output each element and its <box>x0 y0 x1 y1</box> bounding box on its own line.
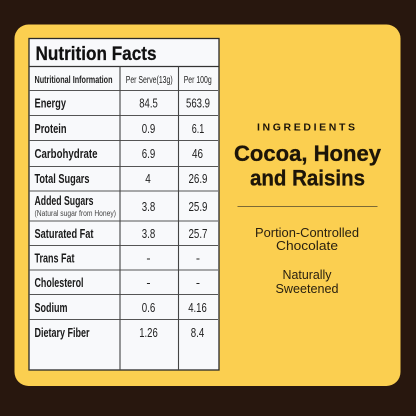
row: Added Sugars: (Natural sugar from Honey) <box>34 209 116 218</box>
row: Saturated Fat: 25.7 <box>188 227 208 241</box>
row: Trans Fat <box>34 252 200 266</box>
row: Total Sugars: Total Sugars <box>34 172 90 186</box>
row: Trans Fat: Trans Fat <box>34 252 75 266</box>
row: Total Sugars: 4 <box>145 172 151 186</box>
row: Protein: Protein <box>34 122 66 136</box>
row: Cholesterol: - <box>146 276 151 290</box>
panel: nutrition table <box>29 38 219 370</box>
heading: product ingredients: and Raisins <box>250 166 365 190</box>
row: Dietary Fiber: 8.4 <box>191 326 204 340</box>
text block: naturally sweetened: Naturally <box>282 268 332 282</box>
row: Dietary Fiber: 1.26 <box>139 326 158 340</box>
row: Energy <box>34 96 210 110</box>
row: Total Sugars <box>34 172 208 186</box>
column headers: Per 100g <box>184 75 212 86</box>
row: Added Sugars <box>34 194 208 218</box>
row: Added Sugars: 25.9 <box>188 200 208 214</box>
column headers: Per Serve(13g) <box>126 75 173 86</box>
row: Protein <box>34 122 204 136</box>
row: Protein: 6.1 <box>192 122 204 136</box>
row: Trans Fat: - <box>196 252 200 266</box>
row: Cholesterol: - <box>196 276 200 290</box>
divider <box>238 206 378 207</box>
row: Sodium: 0.6 <box>142 301 155 315</box>
row: Carbohydrate <box>34 147 203 161</box>
text block: portion-controlled <box>255 226 359 253</box>
row: Sodium: 4.16 <box>188 301 207 315</box>
heading: ingredients: INGREDIENTS <box>257 122 355 134</box>
row: Cholesterol: Cholesterol <box>34 276 84 290</box>
heading: Nutrition Facts: Nutrition Facts <box>36 43 157 65</box>
row: Dietary Fiber <box>34 326 204 340</box>
text block: naturally sweetened <box>276 268 339 296</box>
row: Added Sugars: Added Sugars <box>34 194 94 208</box>
row: Carbohydrate: Carbohydrate <box>34 147 98 161</box>
row: Energy: 563.9 <box>186 96 210 110</box>
row: Dietary Fiber: Dietary Fiber <box>34 326 90 340</box>
text block: naturally sweetened: Sweetened <box>276 282 339 296</box>
text block: portion-controlled: Chocolate <box>276 239 338 253</box>
row: Trans Fat: - <box>146 252 151 266</box>
column headers <box>34 75 212 86</box>
row: Carbohydrate: 46 <box>192 147 203 161</box>
row: Saturated Fat: 3.8 <box>142 227 155 241</box>
row: Energy: Energy <box>34 96 66 110</box>
row: Cholesterol <box>34 276 200 290</box>
row: Sodium <box>34 301 207 315</box>
row: Protein: 0.9 <box>142 122 155 136</box>
row: Saturated Fat: Saturated Fat <box>34 227 94 241</box>
row: Carbohydrate: 6.9 <box>142 147 155 161</box>
column headers: Nutritional Information <box>34 75 112 86</box>
row: Sodium: Sodium <box>34 301 68 315</box>
heading: product ingredients: Cocoa, Honey <box>234 141 382 166</box>
row: Added Sugars: 3.8 <box>142 200 155 214</box>
heading: product ingredients <box>234 141 382 190</box>
row: Saturated Fat <box>34 227 208 241</box>
text block: portion-controlled: Portion-Controlled <box>255 226 359 240</box>
text block: ingredients <box>234 122 382 190</box>
row: Energy: 84.5 <box>139 96 158 110</box>
row: Total Sugars: 26.9 <box>188 172 208 186</box>
